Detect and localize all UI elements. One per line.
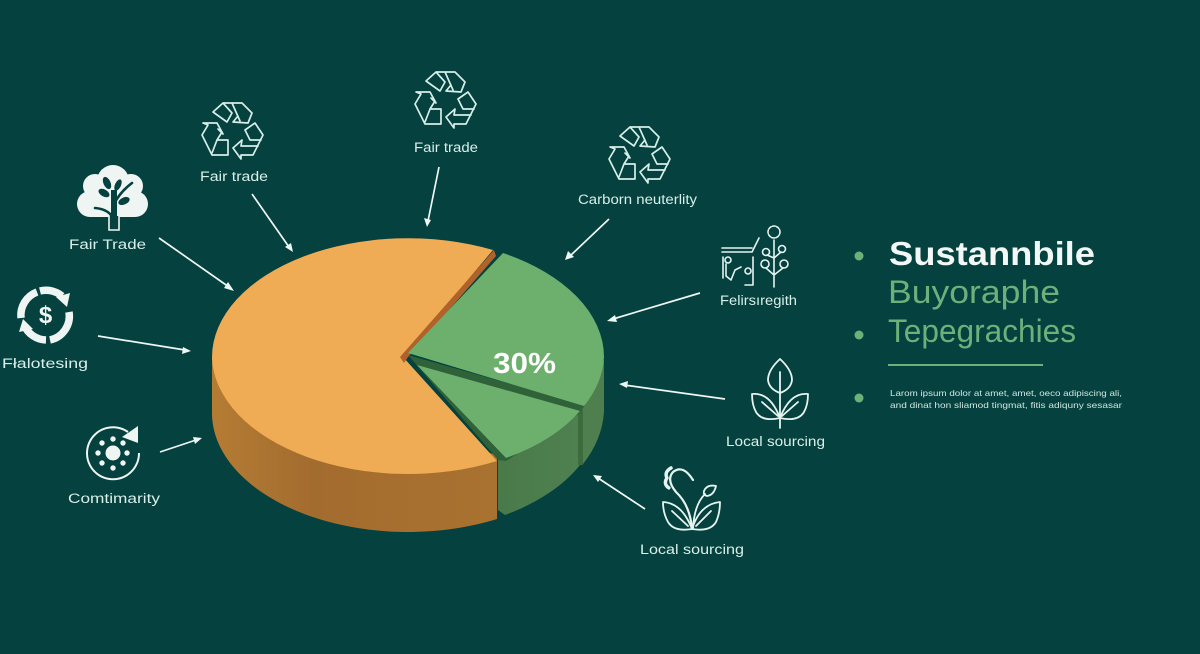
3D pie chart	[212, 238, 604, 532]
green upper slice top	[408, 253, 604, 406]
arrow: Community	[160, 437, 202, 452]
divider	[888, 364, 1043, 366]
arrow: Fair trade left	[252, 194, 293, 252]
label: Fair Trade: Fair Trade	[69, 237, 146, 252]
label: Community: Comtimarity	[68, 491, 160, 506]
icon: recycle right	[609, 127, 670, 183]
icon: community circle	[87, 426, 139, 479]
green slice side wall	[498, 405, 580, 515]
label: Fair trade left: Fair trade	[200, 169, 268, 184]
body text	[890, 388, 1122, 410]
label: Local sourcing lower: Local sourcing	[640, 542, 744, 557]
icon: dollar cycle: $	[39, 302, 53, 329]
icon: three-leaf sprout	[752, 359, 808, 428]
icon: curled plant	[663, 468, 720, 530]
label: Revaluing: Fłalotesing	[2, 356, 88, 371]
vertical seam on side wall	[578, 410, 583, 465]
green lower slice top	[417, 365, 580, 458]
label: Fair trade top: Fair trade	[414, 140, 478, 155]
arrow: Carbon neutrality	[565, 219, 609, 260]
percentage label: 30%	[493, 348, 556, 380]
heading: third line: Tepegrachies	[888, 313, 1076, 349]
arrow: Fair Trade	[159, 238, 234, 291]
bullet dots	[854, 252, 864, 402]
arrow: Felirsiregith	[607, 293, 700, 322]
heading: second line: Buyoraphe	[888, 274, 1060, 310]
green right side wall	[582, 360, 604, 464]
icon: dollar cycle	[19, 290, 70, 340]
brown cut edge	[400, 250, 496, 363]
orange slice top	[212, 238, 497, 474]
arrow: Local sourcing upper	[619, 381, 725, 399]
body text: and dinat hon sliamod tingmat, fitis adiquny sesasar	[890, 400, 1122, 410]
label: Carbon neutrality: Carborn neuterlity	[578, 192, 697, 207]
dark gap between green slices	[408, 355, 585, 461]
label: Felirsiregith: Felirsıregith	[720, 293, 797, 308]
arrow: Local sourcing lower	[593, 475, 645, 509]
orange slice side wall	[212, 357, 497, 532]
label: Local sourcing upper: Local sourcing	[726, 434, 825, 449]
icon: recycle left	[202, 103, 263, 159]
body text: Larom ipsum dolor at amet, amet, oeco adipiscing ali,	[890, 388, 1122, 398]
legend panel	[854, 235, 1122, 410]
icon: tree	[77, 165, 148, 230]
heading: first line: Sustannbile	[889, 235, 1095, 272]
icon: building and plant	[722, 226, 788, 287]
arrow: Revaluing	[98, 336, 191, 354]
arrow: Fair trade top	[424, 167, 439, 227]
icon: recycle top	[415, 72, 476, 128]
